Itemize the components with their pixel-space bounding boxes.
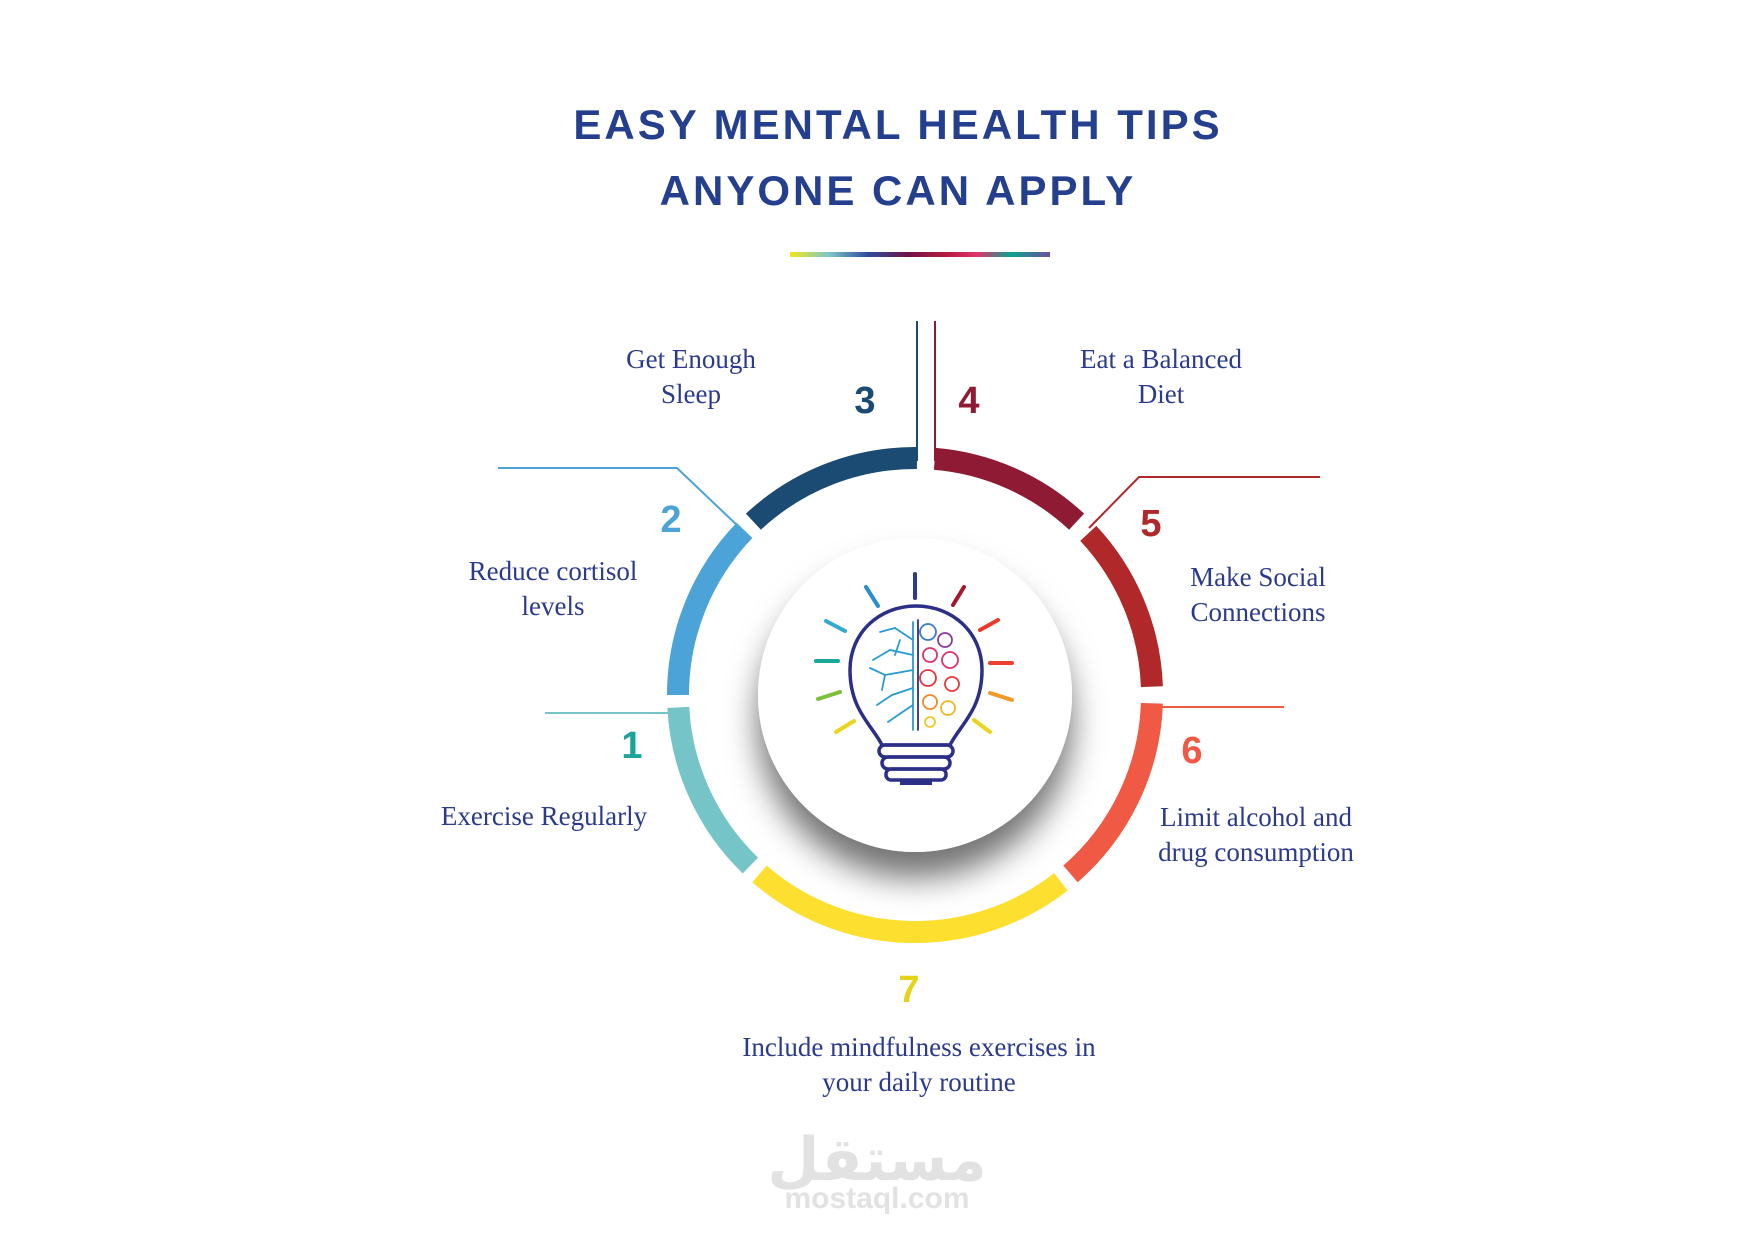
tip texts: Make Social xyxy=(1190,562,1326,592)
watermark: mostaql.com xyxy=(784,1182,970,1215)
tip texts: Eat a Balanced xyxy=(1080,344,1242,374)
tip texts: Diet xyxy=(1138,379,1185,409)
tip texts: levels xyxy=(522,591,584,621)
tip texts: Connections xyxy=(1190,597,1326,627)
gradient underline xyxy=(790,252,1050,257)
tip texts: Sleep xyxy=(661,379,721,409)
icon: lightbulb brain xyxy=(816,574,1012,785)
connector lines xyxy=(498,321,1320,713)
numbers: 2 xyxy=(660,499,682,541)
tip texts: drug consumption xyxy=(1158,837,1354,867)
numbers: 7 xyxy=(898,969,920,1011)
tip texts: Exercise Regularly xyxy=(441,801,648,831)
numbers: 5 xyxy=(1140,503,1162,545)
title: ANYONE CAN APPLY xyxy=(660,167,1136,214)
tip texts: Reduce cortisol xyxy=(469,556,637,586)
title: EASY MENTAL HEALTH TIPS xyxy=(573,101,1223,148)
watermark: مستقل xyxy=(767,1125,987,1195)
title xyxy=(573,101,1223,214)
tip texts: Include mindfulness exercises in xyxy=(742,1032,1096,1062)
numbers: 4 xyxy=(958,380,980,422)
ring segments xyxy=(678,458,1152,932)
tip texts: Limit alcohol and xyxy=(1160,802,1352,832)
numbers: 1 xyxy=(621,725,643,767)
tip texts xyxy=(441,344,1354,1097)
center circle xyxy=(758,538,1072,852)
tip texts: Get Enough xyxy=(626,344,756,374)
numbers: 6 xyxy=(1181,730,1203,772)
numbers: 3 xyxy=(854,380,876,422)
numbers xyxy=(621,380,1203,1011)
tip texts: your daily routine xyxy=(822,1067,1016,1097)
